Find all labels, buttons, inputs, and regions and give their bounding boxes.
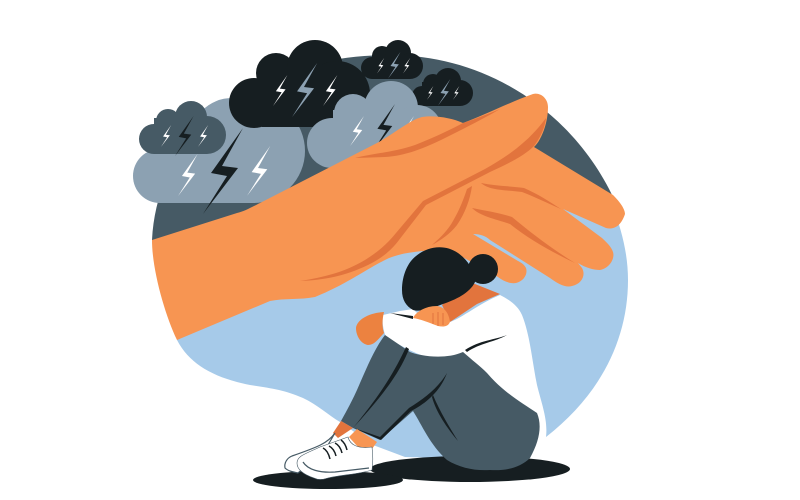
cloud: medium grey-blue [307, 81, 442, 168]
shoes and ankles [285, 421, 377, 480]
ground shadow: main [370, 456, 570, 482]
person: hair [402, 247, 475, 311]
person sitting hugging knees [341, 247, 546, 470]
hand: palm, wrist and fingers [152, 94, 625, 340]
person: arm shadow line [390, 313, 413, 319]
ankle: front [349, 429, 377, 449]
person: hair bun [468, 254, 498, 284]
shoe: front [297, 437, 373, 480]
person: white shirt [383, 295, 546, 445]
hand: finger crease lower [472, 208, 575, 263]
shoe: sole line [303, 462, 369, 472]
person: pants crease lines [353, 335, 507, 441]
shoe: back [285, 433, 335, 473]
ground shadow: feet [253, 471, 403, 489]
ankle: back [333, 421, 353, 438]
giant comforting hand [152, 94, 625, 340]
cloud: far right black [412, 68, 473, 106]
hand: palm branch crease [432, 186, 472, 245]
person: left fist [356, 312, 384, 345]
hand: index underside and thumb crease [300, 118, 546, 281]
cloud: small slate [139, 101, 226, 156]
cloud: top right black [361, 40, 423, 79]
person: pants [341, 335, 540, 470]
shoe: laces [323, 440, 347, 459]
cloud: large grey-blue [133, 98, 305, 214]
person: neck [442, 282, 500, 322]
background blob: dark slate sky [152, 55, 614, 245]
hand: index finger crease [355, 109, 500, 158]
person: right hand on arm [413, 306, 450, 327]
background blob: light blue [177, 200, 628, 458]
hand: finger crease upper [481, 183, 561, 209]
cloud: large black [229, 40, 370, 128]
